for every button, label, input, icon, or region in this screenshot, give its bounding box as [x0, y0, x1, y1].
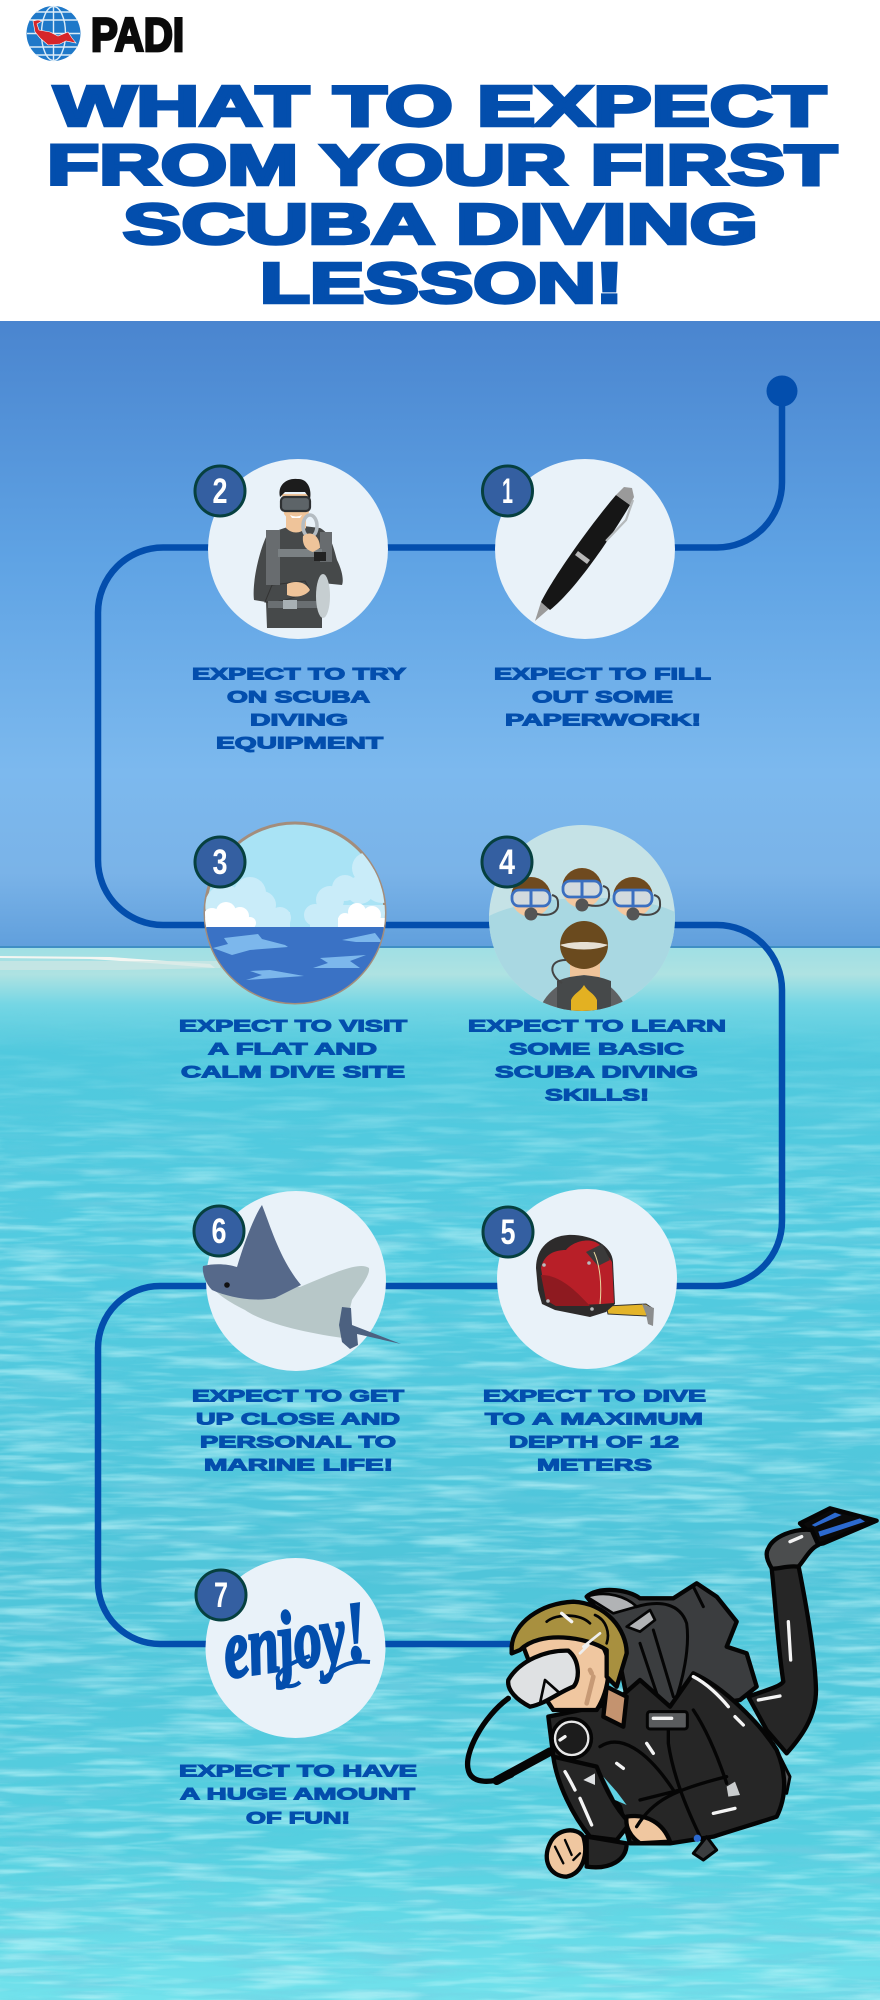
- number badge: [483, 1207, 533, 1257]
- number badge: [482, 466, 532, 516]
- caption: EXPECT TO FILL: [494, 664, 711, 684]
- circle: [497, 1189, 677, 1369]
- wordmark: PADI: [91, 8, 184, 61]
- hair: [512, 1602, 627, 1687]
- caption: [483, 1386, 706, 1474]
- caption: EQUIPMENT: [216, 734, 384, 752]
- logo: PADI: [26, 6, 184, 61]
- forearm skin: [626, 1816, 670, 1843]
- neck: [603, 1687, 627, 1727]
- background: sky: [0, 321, 880, 948]
- regulator: [552, 1719, 591, 1758]
- illustration: instructor and students: [489, 868, 675, 1011]
- illustration: sea and clouds: [205, 853, 385, 1003]
- hand: [547, 1830, 585, 1877]
- number badge: [194, 1206, 244, 1256]
- path start dot: [766, 376, 798, 406]
- number badge: 6: [212, 1212, 226, 1251]
- number badge: [482, 837, 532, 887]
- caption: EXPECT TO GET: [192, 1386, 405, 1406]
- arm: [553, 1757, 630, 1840]
- caption: CALM DIVE SITE: [181, 1062, 405, 1082]
- lettering: enjoy: [217, 1585, 372, 1697]
- step 7: fun: [179, 1558, 417, 1828]
- caption: SKILLS!: [545, 1086, 649, 1104]
- caption: TO A MAXIMUM: [485, 1410, 703, 1428]
- caption: [192, 1386, 405, 1474]
- circle: [206, 1191, 386, 1371]
- circle: [208, 459, 388, 639]
- caption: [179, 1016, 408, 1082]
- number badge: 1: [502, 472, 513, 511]
- circle: [495, 459, 675, 639]
- wet-suit highlights: [560, 1537, 802, 1825]
- background: sea: [0, 946, 880, 2000]
- caption: METERS: [537, 1456, 652, 1474]
- caption: OUT SOME: [532, 688, 673, 706]
- number badge: 5: [500, 1213, 516, 1252]
- lettering: enjoy: enjoy!: [217, 1585, 372, 1697]
- leg: [748, 1565, 816, 1753]
- caption: EXPECT TO HAVE: [179, 1762, 417, 1780]
- step 2: equipment: [192, 459, 407, 752]
- caption: [179, 1762, 417, 1828]
- illustration: scuba diver: [468, 1508, 877, 1877]
- icon: tape measure: [536, 1235, 654, 1326]
- number badge: [195, 837, 245, 887]
- caption: PERSONAL TO: [200, 1432, 396, 1452]
- caption: SOME BASIC: [509, 1040, 684, 1058]
- harness straps: [600, 1710, 727, 1850]
- caption: A FLAT AND: [208, 1040, 377, 1058]
- caption: EXPECT TO DIVE: [483, 1386, 706, 1406]
- caption: [468, 1016, 726, 1104]
- step 4: skills: [468, 825, 726, 1104]
- tank and jacket back: [587, 1583, 757, 1710]
- icon: manta ray: [203, 1205, 401, 1349]
- title: [47, 74, 837, 316]
- step 5: depth: [483, 1189, 706, 1474]
- title: WHAT TO EXPECT: [54, 74, 826, 138]
- face: [523, 1635, 608, 1710]
- circle: [205, 823, 385, 1003]
- boot: [767, 1530, 818, 1569]
- caption: EXPECT TO TRY: [192, 664, 407, 684]
- number badge: 3: [212, 843, 228, 882]
- title: LESSON!: [260, 252, 623, 316]
- caption: MARINE LIFE!: [204, 1456, 393, 1474]
- caption: SCUBA DIVING: [495, 1062, 698, 1082]
- step 1: paperwork: [482, 459, 711, 730]
- number badge: 7: [214, 1576, 228, 1615]
- title: SCUBA DIVING: [123, 192, 758, 256]
- icon: pen: [535, 487, 634, 621]
- side pocket: [773, 1743, 790, 1793]
- caption: DEPTH OF 12: [509, 1432, 679, 1452]
- icon: person in wetsuit: [254, 479, 343, 628]
- hose: [468, 1698, 512, 1781]
- number badge: 2: [212, 472, 228, 511]
- caption: OF FUN!: [246, 1808, 350, 1828]
- title: FROM YOUR FIRST: [47, 134, 837, 198]
- step 6: marine life: [192, 1191, 405, 1474]
- caption: DIVING: [250, 710, 348, 730]
- torso: [548, 1673, 784, 1843]
- circle: [489, 825, 675, 1011]
- number badge: 4: [499, 843, 515, 882]
- fin: [800, 1508, 877, 1545]
- caption: [494, 664, 711, 730]
- mask: [508, 1651, 578, 1707]
- caption: UP CLOSE AND: [196, 1410, 400, 1428]
- caption: ON SCUBA: [227, 688, 370, 706]
- caption: PAPERWORK!: [505, 710, 701, 730]
- icon: globe: [26, 6, 80, 61]
- white header background: [0, 0, 880, 321]
- caption: EXPECT TO LEARN: [468, 1016, 726, 1036]
- path connecting the seven steps: [98, 391, 782, 1644]
- caption: A HUGE AMOUNT: [180, 1784, 416, 1804]
- glove cuff: [587, 1837, 627, 1867]
- number badge: [195, 466, 245, 516]
- circle: [206, 1558, 386, 1738]
- caption: [192, 664, 407, 752]
- caption: EXPECT TO VISIT: [179, 1016, 408, 1036]
- number badge: [196, 1570, 246, 1620]
- step 3: dive site: [179, 823, 408, 1082]
